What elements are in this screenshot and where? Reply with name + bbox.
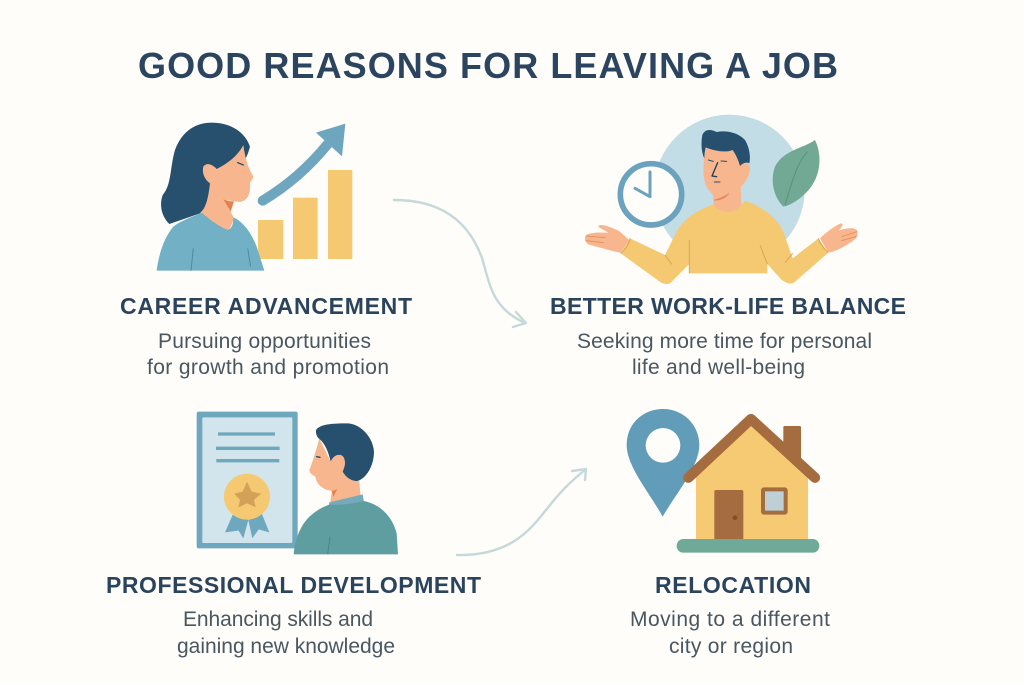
text: relocation description: city or region xyxy=(669,635,793,658)
heading: career advancement: CAREER ADVANCEMENT xyxy=(120,293,412,319)
text: relocation description xyxy=(630,608,830,658)
text: professional development description: gaining new knowledge xyxy=(177,635,395,658)
text: professional development description xyxy=(177,608,395,658)
heading: professional development: PROFESSIONAL DEVELOPMENT xyxy=(106,572,481,598)
title: GOOD REASONS FOR LEAVING A JOB xyxy=(138,45,838,86)
icon: man with clock and leaf xyxy=(585,115,858,284)
icon: woman with growth chart xyxy=(157,123,352,271)
text: work-life balance description xyxy=(577,330,872,379)
text: relocation description: Moving to a different xyxy=(630,608,830,631)
arrow: career advancement to work-life balance xyxy=(394,200,526,327)
icon: certificate and man xyxy=(197,412,398,554)
text: work-life balance description: life and well-being xyxy=(632,356,805,379)
text: career advancement description: Pursuing opportunities xyxy=(158,330,371,353)
arrow: professional development to relocation xyxy=(457,469,586,555)
text: work-life balance description: Seeking more time for personal xyxy=(577,330,872,353)
heading: relocation: RELOCATION xyxy=(655,572,811,598)
icon: location pin and house xyxy=(627,409,819,553)
heading: better work-life balance: BETTER WORK-LIFE BALANCE xyxy=(550,293,906,319)
text: career advancement description xyxy=(147,330,389,379)
text: professional development description: Enhancing skills and xyxy=(183,608,373,631)
text: career advancement description: for growth and promotion xyxy=(147,356,389,379)
